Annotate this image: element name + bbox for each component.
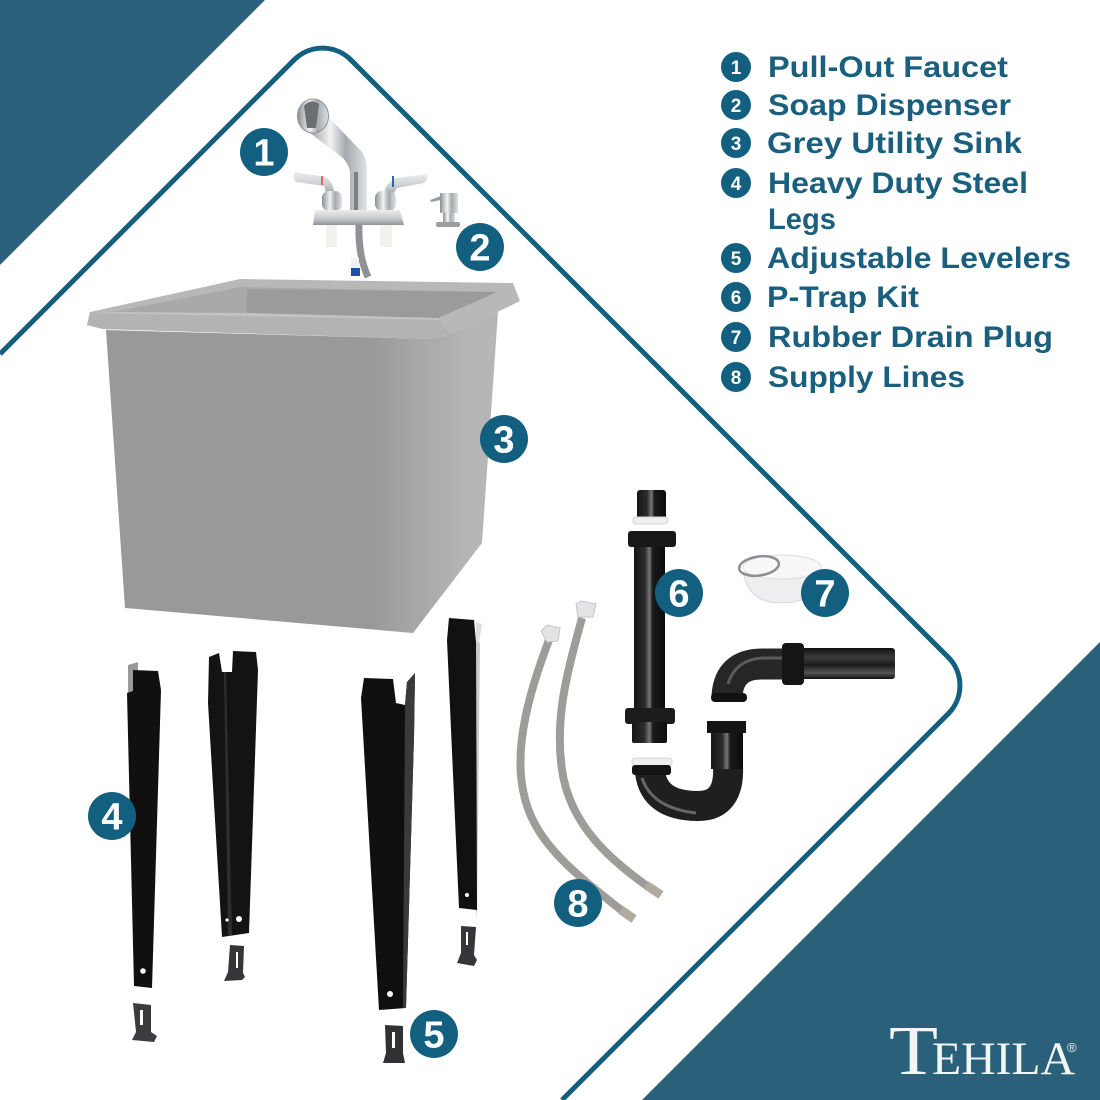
number marker 7: 7 <box>814 574 836 616</box>
number marker 2: 2 <box>469 228 491 270</box>
legend item 8: Supply Lines <box>768 361 965 394</box>
legend item 7: Rubber Drain Plug <box>768 321 1053 354</box>
illustration: grey utility sink <box>87 279 520 633</box>
legend item 1: Pull-Out Faucet <box>768 51 1008 84</box>
number marker 3 <box>480 415 528 463</box>
background corner: bottom right <box>642 642 1100 1100</box>
legend item 7: 7 <box>731 328 741 349</box>
number marker 2 <box>456 223 504 271</box>
number marker 8: 8 <box>567 884 589 926</box>
legend item 2: 2 <box>731 96 741 117</box>
parts legend <box>721 51 1071 394</box>
number marker 5 <box>410 1010 458 1058</box>
illustration: supply lines <box>520 601 661 919</box>
background corner: top left <box>0 0 265 265</box>
illustration: heavy duty steel leg D <box>447 618 482 918</box>
brand logo <box>889 1013 1077 1090</box>
legend item 5: Adjustable Levelers <box>767 242 1071 275</box>
legend item 6: P-Trap Kit <box>767 281 919 314</box>
legend item 3: 3 <box>731 134 741 155</box>
legend item 4 <box>721 167 1028 236</box>
p-trap tailpiece <box>625 490 676 743</box>
illustration: heavy duty steel leg A <box>127 662 161 988</box>
illustration: soap dispenser <box>430 193 460 227</box>
brand logo: ® <box>1067 1040 1077 1055</box>
legend item 8: 8 <box>731 368 741 389</box>
illustration: pull-out faucet <box>294 99 428 277</box>
number marker 3: 3 <box>493 420 515 462</box>
illustration: heavy duty steel leg B <box>208 651 258 937</box>
p-trap elbow <box>711 643 895 702</box>
illustration: rubber drain plug <box>738 554 821 603</box>
illustration: heavy duty steel leg C <box>361 673 415 1010</box>
number marker 4: 4 <box>101 796 123 838</box>
brand logo: EHILA <box>932 1033 1075 1085</box>
legend item 4: 4 <box>731 174 742 195</box>
number marker 6 <box>655 569 703 617</box>
illustration: adjustable leveler B <box>224 945 245 981</box>
number marker 6: 6 <box>668 574 690 616</box>
number marker 1 <box>240 128 288 176</box>
number marker 4 <box>88 792 136 840</box>
legend item 1: 1 <box>731 58 742 79</box>
legend item 4: Legs <box>768 203 836 236</box>
number marker 7 <box>801 569 849 617</box>
number marker 8 <box>554 879 602 927</box>
brand logo: T <box>889 1013 938 1090</box>
legend item 5: 5 <box>731 249 742 270</box>
p-trap u-bend <box>632 721 746 813</box>
legend item 4: Heavy Duty Steel <box>768 167 1028 200</box>
legend item 2: Soap Dispenser <box>768 89 1011 122</box>
illustration: p-trap kit <box>625 490 895 813</box>
legend item 3: Grey Utility Sink <box>767 127 1022 160</box>
number marker 5: 5 <box>423 1014 445 1056</box>
illustration: adjustable leveler A <box>132 1003 157 1042</box>
illustration: adjustable leveler D <box>457 926 477 966</box>
legend item 6: 6 <box>731 288 741 309</box>
illustration: adjustable leveler C <box>383 1025 405 1063</box>
number marker 1: 1 <box>253 132 275 174</box>
